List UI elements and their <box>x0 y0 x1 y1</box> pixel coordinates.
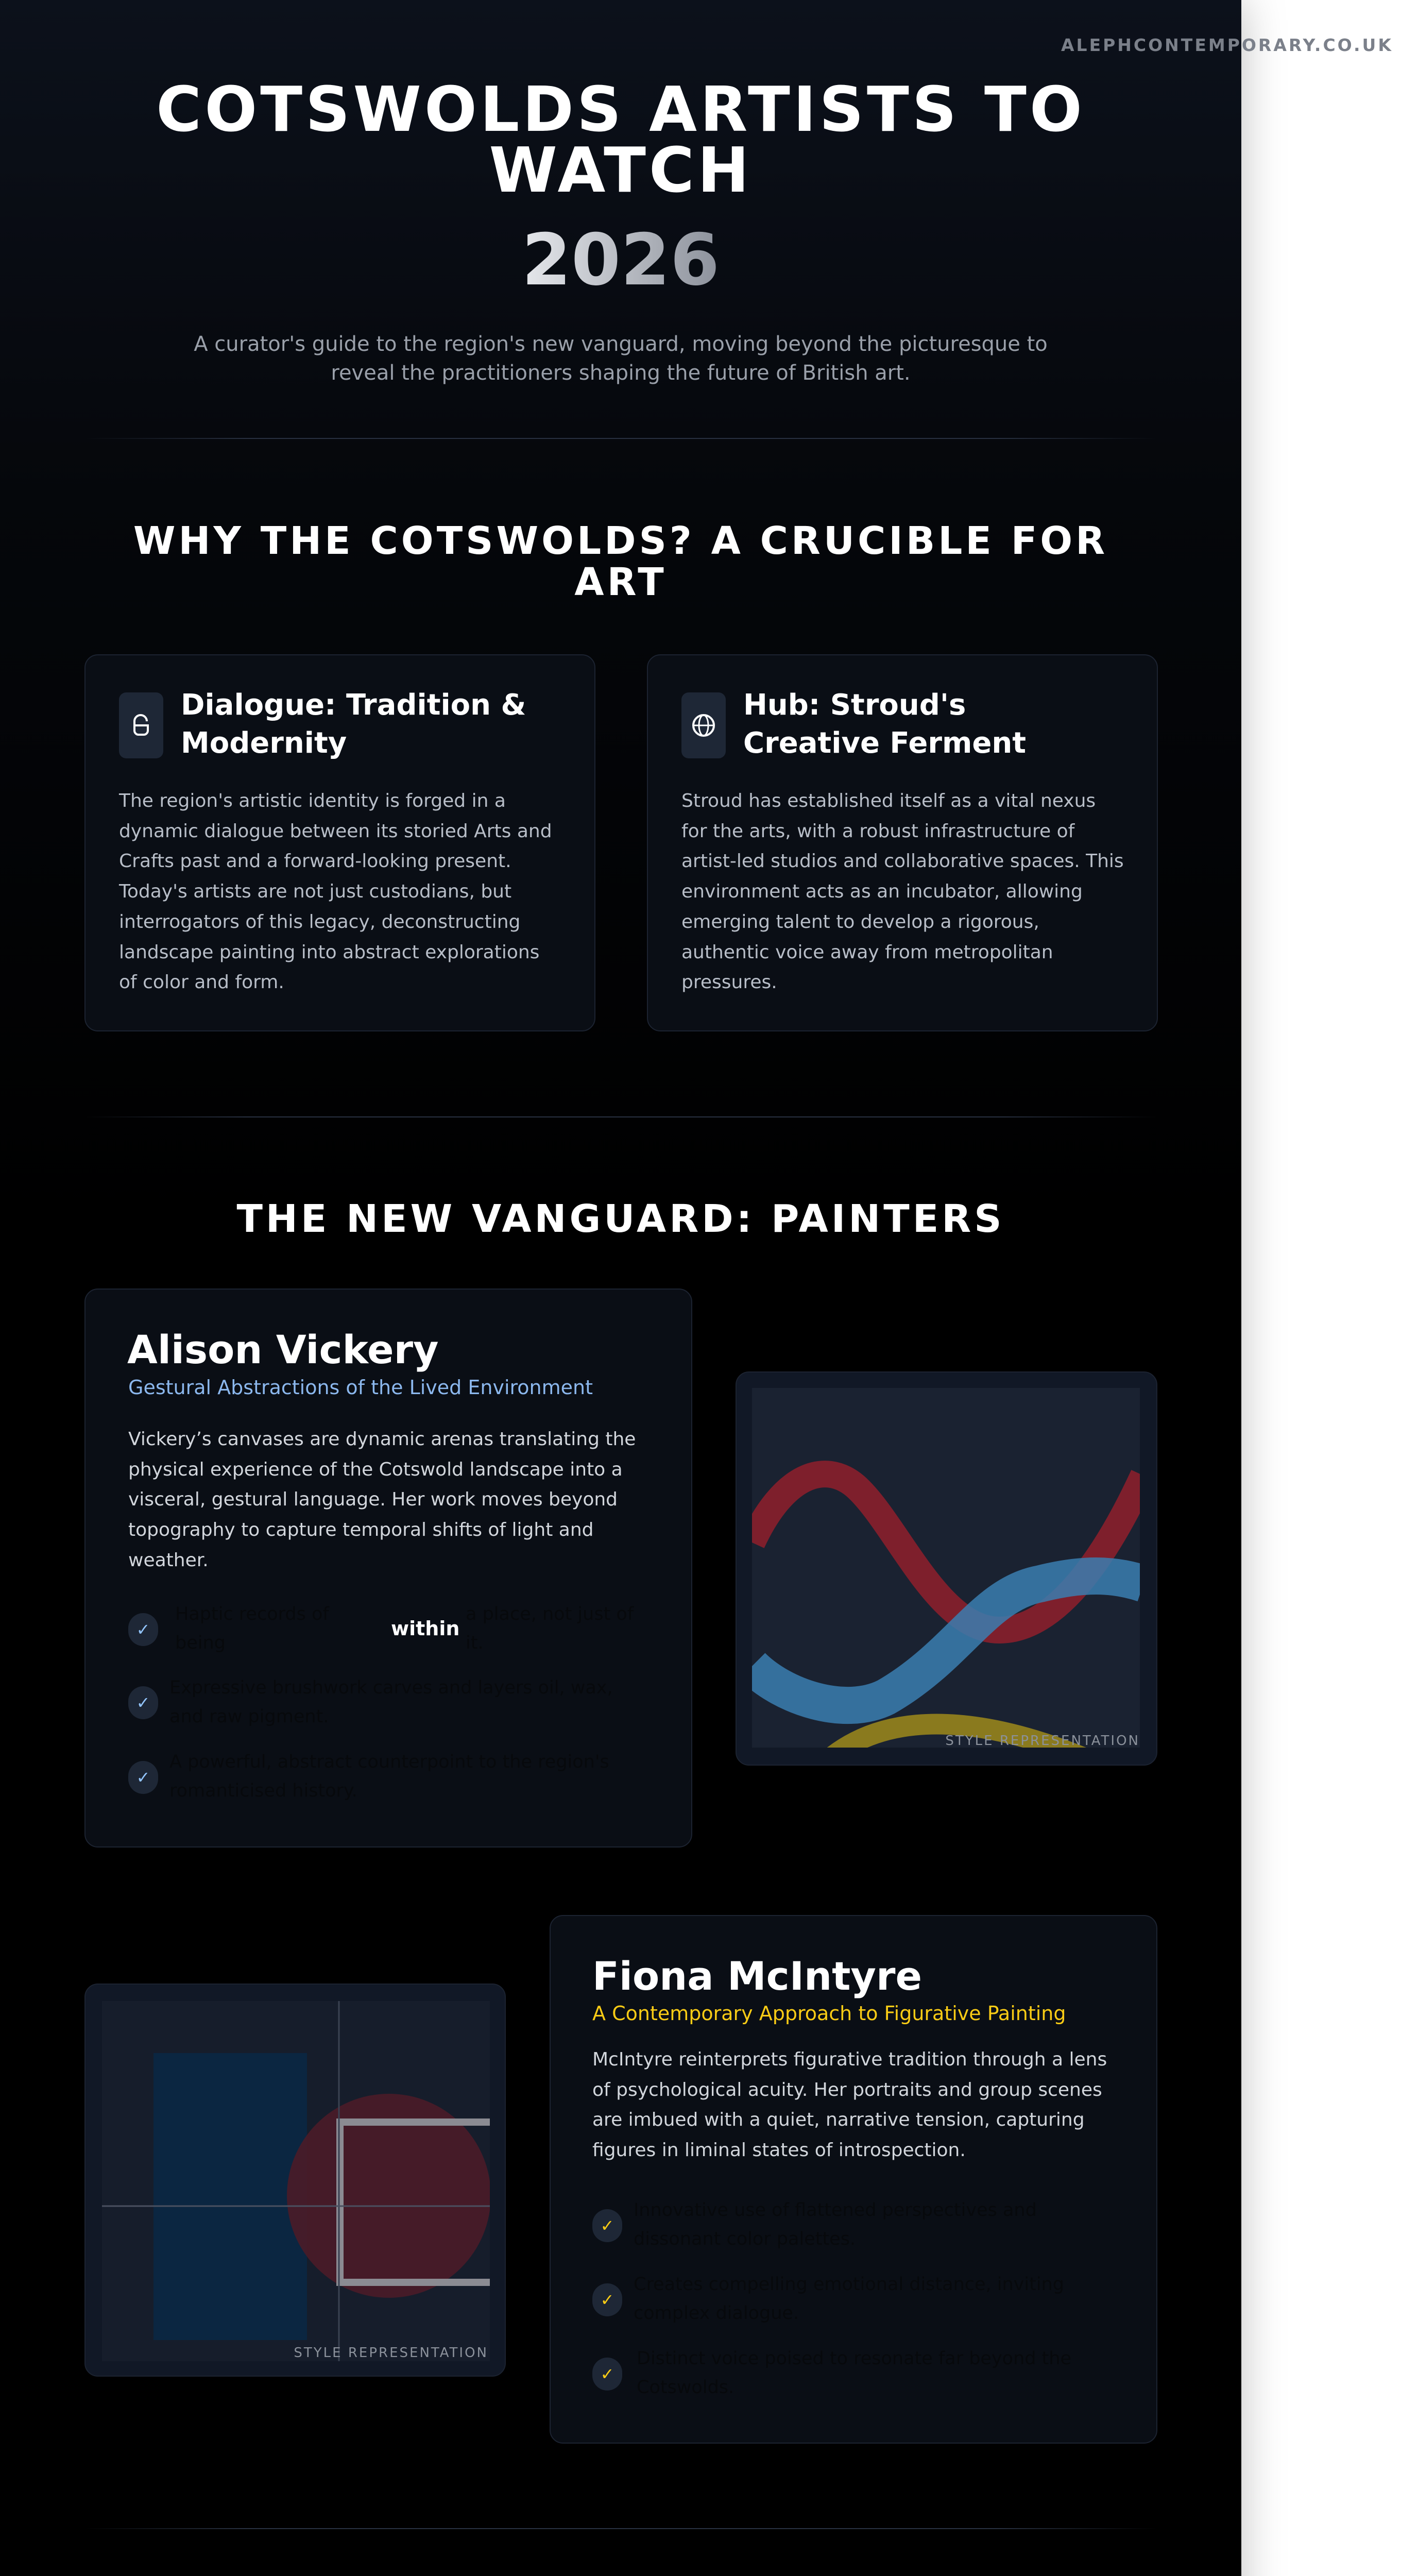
title <box>156 74 1085 207</box>
heading <box>743 688 1026 760</box>
heading: why the cotswolds <box>133 519 1108 604</box>
text: The region's artistic identity is forged in a dynamic dialogue between its storied Arts and Crafts past and a forward-looking present. Today's artists are not just custodians, but interrogators of this legacy, deconstructing landscape painting into abstract explorations of color and form. <box>119 790 552 993</box>
checklist: ✓ <box>601 2216 614 2235</box>
checklist: and raw pigment. <box>169 1706 329 1727</box>
subtitle: A curator's guide to the region's new vanguard, moving beyond the picturesque to <box>194 332 1048 356</box>
checklist: Haptic records of <box>175 1604 329 1624</box>
subtitle: reveal the practitioners shaping the future of British art. <box>331 361 911 385</box>
checklist: Creates compelling emotional distance, inviting <box>634 2274 1064 2295</box>
checklist: within <box>391 1617 459 1640</box>
heading: Hub: Stroud's <box>743 688 966 722</box>
subtitle <box>194 332 1048 385</box>
artwork: alison style representation <box>736 1371 1157 1766</box>
checklist: ✓ <box>136 1693 150 1713</box>
heading: Dialogue: Tradition & <box>181 688 526 722</box>
name: Fiona McIntyre <box>592 1953 922 1999</box>
panel: fiona mcintyre <box>550 1915 1157 2444</box>
title: WATCH <box>489 135 752 207</box>
heading: painters: THE NEW VANGUARD: PAINTERS <box>236 1197 1005 1241</box>
subtitle: Gestural Abstractions of the Lived Environment <box>128 1376 593 1399</box>
checklist: ✓ <box>601 2364 614 2384</box>
checklist: a place, not just of <box>466 1604 634 1624</box>
heading: why the cotswolds: WHY THE COTSWOLDS? A CRUCIBLE FOR <box>133 519 1108 563</box>
checklist: ✓ <box>136 1768 150 1787</box>
icon: globe <box>681 692 726 758</box>
checklist: it. <box>466 1633 484 1653</box>
subtitle: A Contemporary Approach to Figurative Painting <box>592 2002 1066 2025</box>
text: McIntyre reinterprets figurative tradition through a lens of psychological acuity. Her portraits and group scenes are imbued with a quiet, narrative tension, capturing figures in liminal states of introspection. <box>592 2049 1107 2161</box>
checklist: dissonant color palettes. <box>634 2229 856 2249</box>
checklist: ✓ <box>136 1620 150 1639</box>
checklist: complex dialogue. <box>634 2303 799 2324</box>
checklist: Distinct voice poised to resonate far beyond the <box>637 2348 1071 2369</box>
panel: alison vickery <box>84 1289 692 1848</box>
year 2026: 2026 <box>522 218 720 301</box>
checklist: Cotswolds. <box>637 2377 734 2398</box>
heading: Creative Ferment <box>743 726 1026 760</box>
panel: stroud hub <box>647 654 1158 1031</box>
text: Stroud has established itself as a vital nexus for the arts, with a robust infrastructure of artist-led studios and collaborative spaces. This environment acts as an incubator, allowing emerging talent to develop a rigorous, authentic voice away from metropolitan pressures. <box>681 790 1124 993</box>
title: COTSWOLDS ARTISTS TO <box>156 74 1085 146</box>
checklist: A powerful, abstract counterpoint to the region's <box>169 1752 609 1772</box>
artwork: fiona style representation <box>84 1984 506 2377</box>
heading: why the cotswolds: ART <box>574 560 667 604</box>
checklist <box>128 1604 634 1801</box>
checklist: Innovative use of flattened perspectives and <box>634 2200 1037 2221</box>
heading <box>181 688 526 760</box>
checklist: Expressive brushwork carves and layers oil, wax, <box>169 1677 613 1698</box>
label: STYLE REPRESENTATION <box>945 1733 1140 1749</box>
panel: dialogue <box>84 654 595 1031</box>
label: STYLE REPRESENTATION <box>294 2345 488 2361</box>
checklist: romanticised history. <box>169 1781 357 1801</box>
checklist: ✓ <box>601 2290 614 2310</box>
name: Alison Vickery <box>127 1327 439 1372</box>
checklist: being <box>175 1633 226 1653</box>
checklist <box>592 2200 1071 2398</box>
top-right site label: ALEPHCONTEMPORARY.CO.UK <box>1061 35 1393 55</box>
icon: link <box>119 692 163 758</box>
text: Vickery’s canvases are dynamic arenas translating the physical experience of the Cotswold landscape into a visceral, gestural language. Her work moves beyond topography to capture temporal shifts of light and weather. <box>128 1429 636 1571</box>
heading: Modernity <box>181 726 347 760</box>
